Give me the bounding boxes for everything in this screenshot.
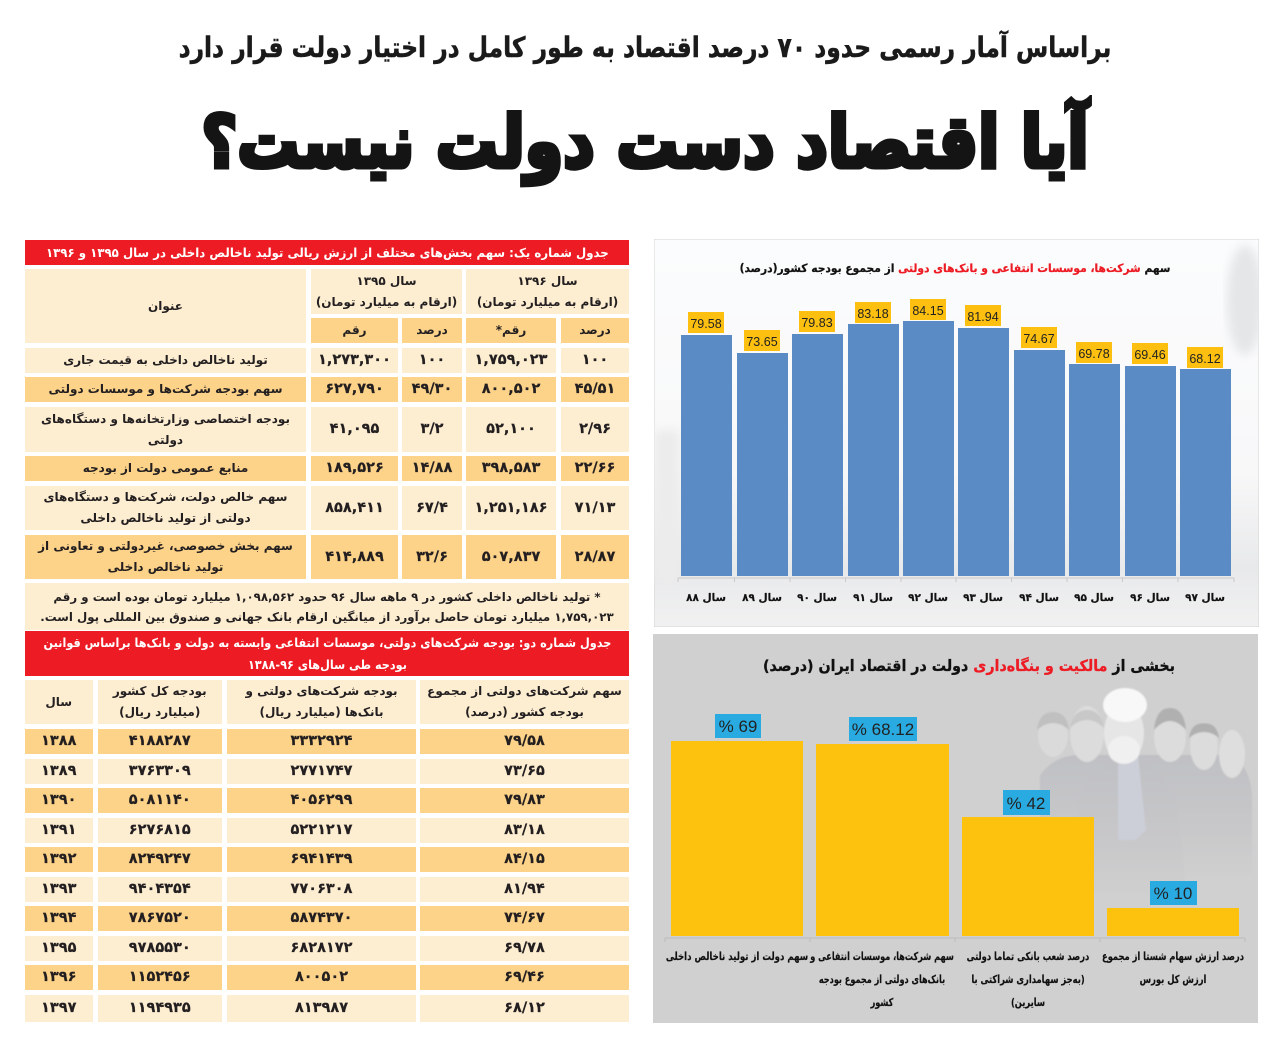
table one header: عنوان	[148, 298, 183, 312]
bar captions: بانک‌های دولتی از مجموع بودجه	[819, 974, 945, 986]
row 1394	[25, 906, 629, 931]
chart title: بخشی از مالکیت و بنگاه‌داری دولت در اقتصاد ایران (درصد)	[763, 656, 1175, 675]
row 1389: ۱۳۸۹	[41, 762, 76, 778]
row 1396: ۱۱۵۲۴۵۶	[129, 969, 191, 985]
subtitle: براساس آمار رسمی حدود ۷۰ درصد اقتصاد به طور کامل در اختیار دولت قرار دارد	[179, 31, 1111, 64]
row 1388	[25, 729, 629, 754]
row: GDP: تولید ناخالص داخلی به قیمت جاری	[63, 353, 268, 367]
bar 97	[1180, 347, 1231, 576]
row: general resources	[25, 456, 629, 481]
bar 88: 79.58	[690, 317, 722, 331]
row 1394: ۱۳۹۴	[41, 910, 76, 926]
table one header: (ارقام به میلیارد تومان)	[316, 294, 457, 308]
bar 91: 83.18	[857, 307, 889, 321]
row: general resources: ۱۸۹,۵۲۶	[325, 460, 384, 476]
footnote: * تولید ناخالص داخلی کشور در ۹ ماهه سال ۹۶ حدود ۱,۰۹۸,۵۶۲ میلیارد تومان بوده است و رقم	[53, 590, 601, 604]
year axis labels: سال ۹۶	[1130, 592, 1170, 604]
bar 95	[1069, 342, 1120, 576]
table one header: درصد	[416, 323, 448, 337]
row 1389: ۳۷۶۳۳۰۹	[129, 762, 191, 778]
row: special budget: بودجه اختصاصی وزارتخانه‌ها و دستگاه‌های دولتی	[41, 412, 290, 446]
bar: government GDP share: % 69	[719, 717, 757, 736]
row: private sector share: ۳۲/۶	[416, 548, 448, 564]
table two heading: جدول شماره دو: بودجه شرکت‌های دولتی، موسسات انتفاعی وابسته به دولت و بانک‌ها براساس قوانین	[43, 634, 611, 650]
row 1396	[25, 965, 629, 990]
row 1388: ۳۳۳۲۹۲۴	[291, 733, 352, 749]
row: net government share: ۶۷/۴	[416, 500, 448, 516]
table two header: (میلیارد ریال)	[119, 705, 200, 719]
row 1389: ۷۳/۶۵	[504, 762, 545, 778]
row: state companies budget: ۸۰۰,۵۰۲	[482, 381, 540, 397]
table two header: بانک‌ها (میلیارد ریال)	[260, 705, 384, 719]
bar: state companies share	[816, 717, 949, 936]
table two header: بودجه کشور (درصد)	[465, 705, 584, 719]
row 1394: ۵۸۷۴۳۷۰	[291, 910, 352, 926]
row 1393: ۸۱/۹۴	[504, 880, 545, 896]
row: GDP: ۱,۲۷۳,۳۰۰	[318, 352, 391, 368]
row 1395: ۶۸۲۸۱۷۲	[291, 940, 352, 956]
row 1389	[25, 759, 629, 784]
table two heading: بودجه طی سال‌های ۹۶-۱۳۸۸	[247, 656, 406, 672]
bar 91	[848, 302, 899, 576]
bar captions: درصد شعب بانکی تماما دولتی	[967, 951, 1089, 963]
row 1392: ۸۴/۱۵	[504, 851, 545, 867]
table one heading: جدول شماره یک: سهم بخش‌های مختلف از ارزش ریالی تولید ناخالص داخلی در سال ۱۳۹۵ و ۱۳۹۶	[46, 245, 608, 260]
year axis labels: سال ۹۳	[963, 592, 1003, 604]
row 1390: ۱۳۹۰	[41, 792, 76, 808]
bar: Shasta shares	[1107, 881, 1239, 936]
table one header: سال ۱۳۹۵	[356, 274, 417, 288]
bar 96	[1125, 343, 1176, 576]
panel: budget share bar chart	[654, 239, 1259, 627]
row: GDP: ۱,۷۵۹,۰۲۳	[475, 352, 547, 368]
panel: table one	[25, 240, 629, 630]
bar 90: 79.83	[801, 316, 833, 330]
row 1391: ۵۲۲۱۲۱۷	[291, 822, 352, 838]
bar captions: ارزش کل بورس	[1140, 974, 1206, 986]
bar captions: کشور	[870, 997, 894, 1009]
row 1388: ۴۱۸۸۲۸۷	[129, 733, 191, 749]
year axis labels: سال ۹۰	[797, 592, 837, 604]
row 1394: ۷۴/۶۷	[504, 910, 545, 926]
row 1388: ۷۹/۵۸	[504, 733, 545, 749]
bar 95: 69.78	[1078, 347, 1110, 361]
year axis labels: سال ۸۹	[742, 592, 782, 604]
row 1396: ۸۰۰۵۰۲	[295, 969, 348, 985]
bar: Shasta shares: % 10	[1154, 884, 1192, 903]
main title: آیا اقتصاد دست دولت نیست؟	[201, 100, 1089, 184]
row: GDP: ۱۰۰	[419, 352, 445, 368]
bar 97: 68.12	[1189, 352, 1221, 366]
chart title: سهم شرکت‌ها، موسسات انتفاعی و بانک‌های دولتی از مجموع بودجه کشور(درصد)	[740, 262, 1170, 275]
row: general resources: ۳۹۸,۵۸۳	[482, 460, 540, 476]
row: net government share: ۸۵۸,۴۱۱	[325, 500, 384, 516]
row 1395: ۱۳۹۵	[41, 940, 76, 956]
bar 90	[792, 311, 843, 576]
table one header: رقم	[342, 323, 367, 337]
row 1396: ۶۹/۴۶	[504, 969, 545, 985]
table two heading	[25, 631, 629, 676]
bar: state companies share: % 68.12	[852, 720, 914, 739]
row: private sector share: ۴۱۴,۸۸۹	[325, 548, 384, 564]
row: state companies budget	[25, 377, 629, 402]
bar captions: (به‌جز سهامداری شراکتی با	[971, 974, 1085, 986]
row 1390: ۷۹/۸۳	[504, 792, 545, 808]
panel: table two	[25, 631, 629, 1022]
bar captions: سهم دولت از تولید ناخالص داخلی	[666, 951, 808, 963]
row: special budget: ۵۲,۱۰۰	[486, 421, 536, 437]
bar 88	[681, 312, 732, 576]
bar 89	[737, 330, 788, 576]
row 1392: ۸۲۴۹۲۴۷	[129, 851, 191, 867]
row 1393: ۱۳۹۳	[41, 880, 76, 896]
row 1390	[25, 788, 629, 813]
bar 92: 84.15	[912, 304, 944, 318]
row: GDP	[25, 348, 629, 373]
row 1391: ۸۳/۱۸	[504, 822, 545, 838]
row: net government share	[25, 486, 629, 530]
row: GDP: ۱۰۰	[582, 352, 608, 368]
year axis labels	[686, 592, 1225, 604]
table two header: سال	[45, 694, 72, 708]
bar 94: 74.67	[1023, 332, 1055, 346]
row: private sector share	[25, 535, 629, 579]
row 1397: ۸۱۳۹۸۷	[295, 1000, 348, 1016]
bar captions: سهم شرکت‌ها، موسسات انتفاعی و	[809, 951, 954, 963]
row: private sector share: ۵۰۷,۸۳۷	[482, 548, 540, 564]
row: state companies budget: ۴۵/۵۱	[575, 381, 615, 397]
row 1391: ۱۳۹۱	[41, 822, 76, 838]
table two header: بودجه شرکت‌های دولتی و	[245, 684, 398, 698]
bar: government GDP share	[671, 714, 803, 936]
row: state companies budget: ۶۲۷,۷۹۰	[325, 381, 384, 397]
row 1397: ۶۸/۱۲	[504, 1000, 545, 1016]
bar: bank branches: % 42	[1007, 794, 1045, 813]
row 1391	[25, 818, 629, 843]
row: general resources: ۲۲/۶۶	[575, 460, 615, 476]
row 1389: ۲۷۷۱۷۴۷	[291, 762, 352, 778]
bar 93: 81.94	[967, 310, 999, 324]
faded photo of officials	[1037, 688, 1252, 900]
row: general resources: منابع عمومی دولت از بودجه	[83, 461, 248, 475]
row 1397	[25, 995, 629, 1022]
year axis labels: سال ۹۱	[853, 592, 893, 604]
row 1393	[25, 877, 629, 902]
panel: ownership bar chart	[653, 634, 1258, 1023]
row 1393: ۷۷۰۶۳۰۸	[291, 880, 352, 896]
row: special budget	[25, 407, 629, 452]
year axis labels: سال ۸۸	[686, 592, 726, 604]
row: special budget: ۳/۲	[420, 421, 444, 437]
row 1396: ۱۳۹۶	[41, 969, 76, 985]
footnote: ۱,۷۵۹,۰۲۳ میلیارد تومان حاصل برآورد از میانگین ارقام بانک جهانی و صندوق بین المللی پول است.	[40, 610, 614, 624]
bar 94	[1014, 327, 1065, 576]
row 1397: ۱۱۹۴۹۳۵	[129, 1000, 191, 1016]
bar 92	[903, 299, 954, 576]
row: state companies budget: ۴۹/۳۰	[412, 381, 452, 397]
table one header: سال ۱۳۹۶	[517, 274, 578, 288]
row 1392: ۱۳۹۲	[41, 851, 76, 867]
row 1397: ۱۳۹۷	[41, 1000, 76, 1016]
row 1392: ۶۹۴۱۴۳۹	[291, 851, 352, 867]
row 1394: ۷۸۶۷۵۲۰	[129, 910, 191, 926]
bar 93	[958, 305, 1009, 576]
bar 96: 69.46	[1134, 348, 1166, 362]
row 1390: ۵۰۸۱۱۴۰	[129, 792, 191, 808]
table one header: رقم*	[496, 323, 526, 337]
table one header: (ارقام به میلیارد تومان)	[477, 294, 618, 308]
row: special budget: ۴۱,۰۹۵	[330, 421, 379, 437]
table one header: درصد	[579, 323, 611, 337]
row 1390: ۴۰۵۶۲۹۹	[291, 792, 352, 808]
row: net government share: ۷۱/۱۳	[575, 500, 615, 516]
table one header	[25, 269, 629, 343]
row: special budget: ۲/۹۶	[579, 421, 611, 437]
bar: bank branches	[962, 790, 1094, 936]
year axis labels: سال ۹۷	[1185, 592, 1225, 604]
row: private sector share: ۲۸/۸۷	[575, 548, 615, 564]
year axis labels: سال ۹۲	[908, 592, 948, 604]
year axis labels: سال ۹۴	[1019, 592, 1059, 604]
year axis labels: سال ۹۵	[1074, 592, 1114, 604]
row 1391: ۶۲۷۶۸۱۵	[129, 822, 191, 838]
table two header: سهم شرکت‌های دولتی از مجموع	[427, 684, 622, 698]
row 1395: ۹۷۸۵۵۳۰	[129, 940, 191, 956]
table one heading	[25, 240, 629, 265]
table two header	[25, 680, 629, 724]
table two header: بودجه کل کشور	[113, 684, 207, 698]
row 1388: ۱۳۸۸	[41, 733, 76, 749]
row: general resources: ۱۴/۸۸	[412, 460, 452, 476]
row 1392	[25, 847, 629, 872]
bar captions: سایرین)	[1011, 997, 1045, 1009]
row: state companies budget: سهم بودجه شرکت‌ها و موسسات دولتی	[48, 382, 283, 396]
footnote	[25, 583, 629, 630]
row: net government share: سهم خالص دولت، شرکت‌ها و دستگاه‌های دولتی از تولید ناخالص داخلی	[44, 490, 287, 525]
bar captions: درصد ارزش سهام شستا از مجموع	[1102, 951, 1244, 963]
row 1395	[25, 936, 629, 961]
row: private sector share: سهم بخش خصوصی، غیردولتی و تعاونی از تولید ناخالص داخلی	[38, 539, 293, 574]
bar captions	[666, 951, 1244, 1009]
row 1395: ۶۹/۷۸	[504, 940, 545, 956]
row 1393: ۹۴۰۴۳۵۴	[129, 880, 191, 896]
bar 89: 73.65	[746, 335, 778, 349]
row: net government share: ۱,۲۵۱,۱۸۶	[475, 500, 547, 516]
